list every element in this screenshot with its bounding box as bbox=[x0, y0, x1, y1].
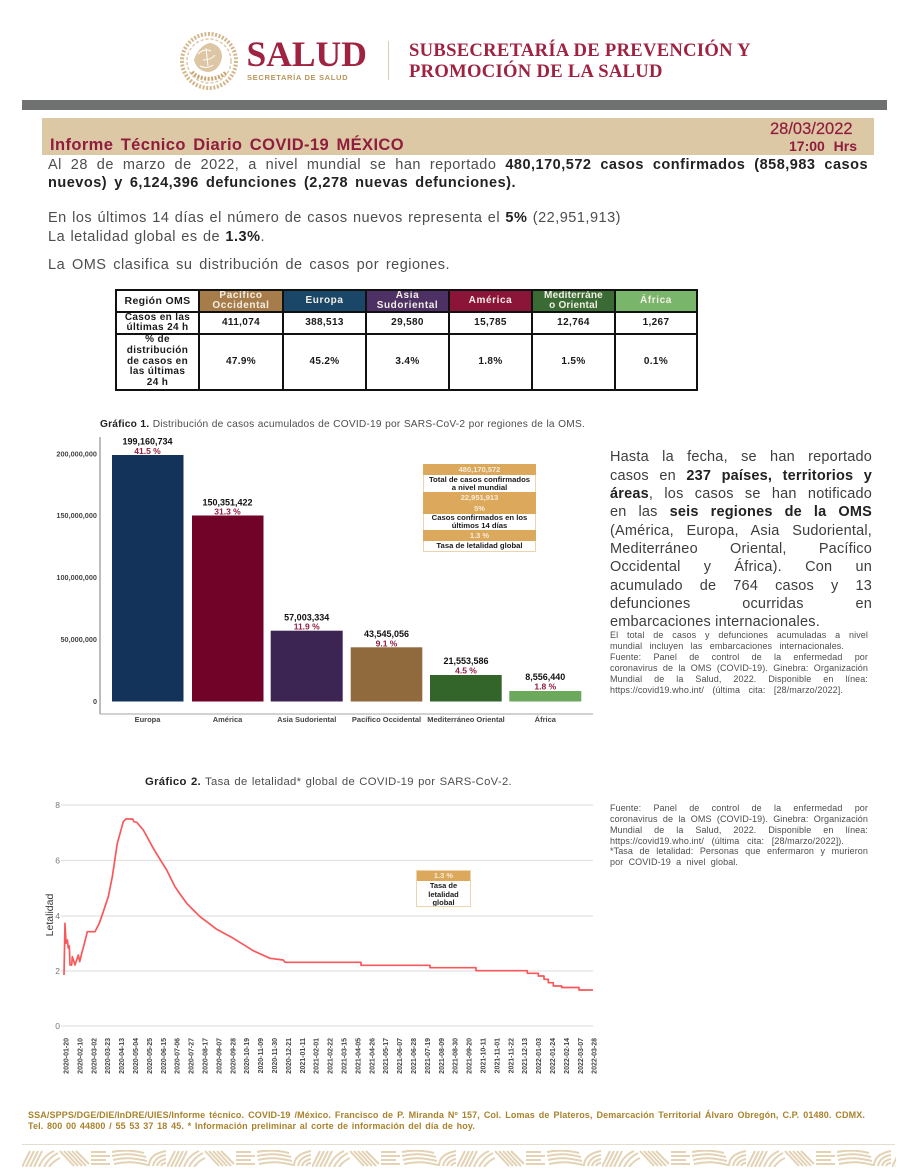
text block: countries and regions: (América, Europa, Asia Sudoriental, bbox=[610, 523, 872, 539]
report time: 17:00 Hrs bbox=[789, 138, 857, 154]
text block: countries and regions: acumulado de 764 casos y 13 bbox=[610, 578, 872, 594]
x axis labels: Pacífico Occidental bbox=[352, 715, 421, 724]
table header row: Occidental bbox=[212, 300, 270, 311]
header: Salud logo and subsecretariat name bbox=[180, 32, 751, 90]
report date: 28/03/2022 bbox=[770, 120, 853, 138]
bar percentages: 31.3 % bbox=[214, 506, 241, 516]
x axis date labels: 2022-03-07 bbox=[578, 1038, 585, 1074]
bar values: 8,556,440 bbox=[525, 672, 565, 682]
bar values bbox=[122, 436, 565, 682]
bar percentages: 9.1 % bbox=[376, 638, 398, 648]
bar values: 57,003,334 bbox=[284, 612, 329, 622]
x axis date labels: 2021-09-20 bbox=[467, 1038, 474, 1074]
x axis date labels: 2021-11-01 bbox=[494, 1038, 501, 1073]
row: cases in last 24 h: 29,580 bbox=[391, 317, 424, 328]
x axis date labels: 2022-01-24 bbox=[550, 1038, 557, 1074]
source note for chart 2: coronavirus de la OMS (COVID-19). Ginebra: Organización bbox=[610, 814, 868, 824]
subsecretariat name: PROMOCIÓN DE LA SALUD bbox=[409, 61, 663, 82]
table header row: Mediterráne bbox=[544, 290, 603, 301]
source note for chart 1: coronavirus de la OMS (COVID-19). Ginebra: Organización bbox=[610, 663, 868, 673]
row: percentage distribution: 1.5% bbox=[561, 356, 586, 367]
source note for chart 2: https://covid19.who.int/ (última cita: [28/marzo/2022]). bbox=[610, 836, 844, 846]
callout: global fatality rate: global bbox=[432, 898, 455, 907]
bar values: 43,545,056 bbox=[364, 629, 409, 639]
y axis title: Letalidad bbox=[44, 894, 56, 936]
x axis date labels: 2020-11-30 bbox=[272, 1038, 279, 1073]
bars bbox=[112, 455, 581, 702]
y axis labels: 0 bbox=[93, 697, 97, 706]
table header row: Sudoriental bbox=[377, 300, 438, 311]
bar values: 21,553,586 bbox=[443, 656, 489, 666]
y axis labels: 50,000,000 bbox=[60, 635, 97, 644]
row: percentage distribution: 47.9% bbox=[226, 356, 256, 367]
x axis date labels: 2020-03-23 bbox=[105, 1038, 112, 1074]
y axis labels bbox=[56, 450, 97, 706]
x axis date labels: 2020-10-19 bbox=[244, 1038, 251, 1074]
x axis labels: Europa bbox=[135, 715, 161, 724]
x axis date labels: 2021-08-09 bbox=[439, 1038, 446, 1074]
intro paragraph bbox=[48, 157, 868, 191]
text block: countries and regions: en las seis regiones de la OMS bbox=[610, 504, 872, 520]
intro paragraph: nuevos) y 6,124,396 defunciones (2,278 nuevas defunciones). bbox=[48, 175, 516, 191]
y axis labels: 0 bbox=[55, 1021, 60, 1031]
x axis date labels: 2022-01-03 bbox=[536, 1038, 543, 1074]
x axis labels: Mediterráneo Oriental bbox=[427, 715, 505, 724]
row: percentage distribution: 45.2% bbox=[309, 356, 340, 367]
x axis date labels: 2021-05-17 bbox=[383, 1038, 390, 1074]
footer address: Tel. 800 00 44800 / 55 53 37 18 45. * Información preliminar al corte de información del día de hoy. bbox=[28, 1121, 475, 1131]
source note for chart 2: por COVID-19 a nivel global. bbox=[610, 857, 738, 867]
bar values: 150,351,422 bbox=[202, 498, 253, 508]
source note for chart 2: Fuente: Panel de control de la enfermedad por bbox=[610, 803, 868, 813]
text block: countries and regions: áreas, los casos se han notificado bbox=[610, 486, 872, 502]
row: percentage distribution bbox=[127, 334, 668, 388]
grid lines bbox=[61, 805, 593, 1026]
table header row bbox=[125, 290, 696, 388]
x axis date labels: 2020-09-28 bbox=[230, 1038, 237, 1074]
table header row: Región OMS bbox=[125, 295, 190, 307]
x axis date labels: 2020-12-21 bbox=[286, 1038, 293, 1074]
row: cases in last 24 h: Casos en las bbox=[125, 312, 190, 323]
x axis date labels: 2021-06-07 bbox=[397, 1038, 404, 1074]
x axis labels bbox=[135, 715, 557, 724]
logo wordmark: SALUD: SALUD bbox=[246, 34, 367, 74]
source note for chart 1: mundial incluyen las embarcaciones internacionales. bbox=[610, 641, 844, 651]
source note for chart 2 bbox=[610, 803, 868, 867]
y axis labels: 150,000,000 bbox=[56, 511, 97, 520]
source note for chart 1: El total de casos y defunciones acumuladas a nivel bbox=[610, 630, 868, 640]
text block: countries and regions: Hasta la fecha, se han reportado bbox=[610, 449, 872, 465]
last 14 days text: En los últimos 14 días el número de casos nuevos representa el 5% (22,951,913) bbox=[48, 210, 621, 226]
x axis date labels: 2021-02-22 bbox=[328, 1038, 335, 1074]
callout: global totals: últimos 14 días bbox=[452, 520, 507, 530]
x axis date labels: 2020-05-25 bbox=[147, 1038, 154, 1074]
bar percentages: 1.8 % bbox=[534, 682, 557, 692]
callout: global totals: 22,951,913 bbox=[461, 492, 498, 502]
last 14 days text: La letalidad global es de 1.3%. bbox=[48, 229, 265, 245]
regions intro text: La OMS clasifica su distribución de casos por regiones. bbox=[48, 257, 450, 273]
x axis date labels: 2021-02-01 bbox=[314, 1038, 321, 1074]
callout: global fatality rate: letalidad bbox=[428, 890, 459, 898]
bar percentages: 41.5 % bbox=[134, 446, 161, 456]
x axis date labels: 2022-02-14 bbox=[564, 1038, 571, 1074]
text block: countries and regions: defunciones ocurridas en bbox=[610, 596, 872, 612]
intro paragraph: Al 28 de marzo de 2022, a nivel mundial se han reportado 480,170,572 casos confirmados (858,983 casos bbox=[48, 157, 868, 173]
y axis labels bbox=[55, 800, 60, 1031]
callout: global totals: Total de casos confirmados bbox=[429, 474, 530, 484]
callout: global fatality rate: Tasa de bbox=[430, 881, 457, 890]
row: percentage distribution: distribución bbox=[127, 345, 188, 356]
callout: global totals: Tasa de letalidad global bbox=[436, 540, 523, 550]
text block: countries and regions: Mediterráneo Oriental, Pacífico bbox=[610, 541, 872, 557]
table header row: Asia bbox=[396, 290, 419, 301]
bar values: 199,160,734 bbox=[122, 436, 173, 446]
table header row: o Oriental bbox=[549, 300, 598, 311]
x axis date labels: 2020-09-07 bbox=[216, 1038, 223, 1074]
title banner bbox=[42, 118, 874, 155]
x axis date labels: 2020-08-17 bbox=[202, 1038, 210, 1074]
decorative footer band bbox=[22, 1150, 896, 1167]
x axis date labels: 2021-03-15 bbox=[342, 1038, 348, 1074]
y axis labels: 8 bbox=[55, 800, 60, 810]
row: cases in last 24 h: 12,764 bbox=[557, 317, 590, 328]
bar percentages bbox=[134, 446, 557, 692]
x axis date labels: 2021-04-26 bbox=[369, 1038, 376, 1074]
callout: global fatality rate bbox=[416, 870, 471, 907]
row: cases in last 24 h: 411,074 bbox=[222, 317, 260, 328]
x axis date labels: 2021-12-13 bbox=[522, 1038, 529, 1074]
fatality line bbox=[64, 819, 593, 990]
callout: global totals: 1.3 % bbox=[470, 530, 489, 540]
row: percentage distribution: de casos en bbox=[127, 356, 188, 367]
x axis labels: Asia Sudoriental bbox=[277, 715, 336, 724]
bar percentages: 4.5 % bbox=[455, 666, 477, 676]
text block: countries and regions: Occidental y África). Con un bbox=[610, 559, 872, 575]
x axis date labels: 2021-08-30 bbox=[453, 1038, 460, 1074]
footer address bbox=[28, 1110, 865, 1131]
x axis labels: América bbox=[213, 715, 243, 724]
y axis labels: 200,000,000 bbox=[56, 450, 97, 458]
row: percentage distribution: 3.4% bbox=[395, 356, 420, 367]
table header row: América bbox=[469, 295, 512, 306]
row: percentage distribution: las últimas bbox=[130, 366, 185, 377]
row: cases in last 24 h bbox=[125, 312, 669, 333]
line chart: global case fatality rate bbox=[44, 800, 599, 1074]
x axis date labels: 2021-10-11 bbox=[480, 1038, 488, 1073]
last 14 days text bbox=[48, 210, 621, 245]
table header row: África bbox=[640, 295, 672, 306]
x axis date labels: 2020-03-02 bbox=[91, 1038, 98, 1074]
x axis date labels: 2020-05-04 bbox=[133, 1038, 140, 1074]
callout: global totals bbox=[423, 464, 536, 552]
row: percentage distribution: 24 h bbox=[147, 377, 168, 388]
subsecretariat name bbox=[409, 40, 751, 82]
chart title: Gráfico 2: Gráfico 2. Tasa de letalidad* global de COVID-19 por SARS-CoV-2. bbox=[145, 776, 512, 788]
x axis date labels: 2022-03-28 bbox=[592, 1038, 599, 1074]
source note for chart 2: Mundial de la Salud, 2022. Disponible en línea: bbox=[610, 825, 868, 835]
source note for chart 1: Fuente: Panel de control de la enfermedad por bbox=[610, 652, 868, 662]
text block: countries and regions bbox=[610, 449, 872, 630]
report title: Informe Técnico Diario COVID-19 MÉXICO bbox=[50, 136, 404, 154]
x axis date labels: 2020-07-06 bbox=[175, 1038, 182, 1074]
x axis date labels: 2021-06-28 bbox=[411, 1038, 418, 1074]
x axis date labels: 2021-11-22 bbox=[508, 1038, 515, 1073]
x axis date labels: 2020-01-20 bbox=[64, 1038, 70, 1074]
logo caption: SECRETARÍA DE SALUD bbox=[247, 73, 348, 82]
x axis date labels: 2021-04-05 bbox=[355, 1038, 362, 1074]
source note for chart 1: Mundial de la Salud, 2022. Disponible en línea: bbox=[610, 674, 868, 684]
y axis labels: 2 bbox=[55, 966, 60, 976]
x axis date labels bbox=[64, 1038, 599, 1074]
text block: countries and regions: embarcaciones internacionales. bbox=[610, 614, 820, 630]
row: percentage distribution: 1.8% bbox=[478, 356, 503, 367]
callout: global totals: 5% bbox=[474, 504, 485, 512]
x axis date labels: 2020-11-09 bbox=[258, 1038, 265, 1073]
table: cases by WHO region bbox=[115, 289, 698, 391]
row: percentage distribution: % de bbox=[145, 334, 170, 345]
x axis date labels: 2020-02-10 bbox=[77, 1038, 84, 1074]
row: percentage distribution: 0.1% bbox=[644, 356, 668, 367]
table header row: Pacífico bbox=[219, 290, 263, 301]
x axis date labels: 2020-06-15 bbox=[161, 1038, 168, 1074]
y axis labels: 100,000,000 bbox=[56, 573, 97, 582]
bar chart: accumulated cases by region bbox=[56, 436, 593, 724]
text block: countries and regions: casos en 237 países, territorios y bbox=[610, 468, 872, 484]
callout: global totals: a nivel mundial bbox=[452, 482, 507, 492]
x axis date labels: 2021-01-11 bbox=[300, 1038, 307, 1073]
x axis date labels: 2020-04-13 bbox=[119, 1038, 126, 1074]
callout: global totals: Casos confirmados en los bbox=[432, 512, 527, 522]
source note for chart 2: *Tasa de letalidad: Personas que enfermaron y murieron bbox=[610, 846, 868, 856]
icon: national emblem bbox=[180, 32, 238, 90]
source note for chart 1: https://covid19.who.int/ (última cita: [28/marzo/2022]. bbox=[610, 685, 843, 695]
subsecretariat name: SUBSECRETARÍA DE PREVENCIÓN Y bbox=[409, 40, 751, 61]
callout: global totals: 480,170,572 bbox=[459, 465, 500, 474]
source note for chart 1 bbox=[610, 630, 868, 695]
bar percentages: 11.9 % bbox=[294, 622, 320, 632]
row: cases in last 24 h: últimas 24 h bbox=[126, 322, 188, 333]
x axis date labels: 2021-07-19 bbox=[425, 1038, 432, 1074]
row: cases in last 24 h: 388,513 bbox=[305, 317, 344, 328]
y axis labels: 4 bbox=[55, 911, 60, 921]
x axis date labels: 2020-07-27 bbox=[189, 1038, 196, 1074]
footer address: SSA/SPPS/DGE/DIE/InDRE/UIES/Informe técnico. COVID-19 /México. Francisco de P. Miranda Nº 157, Col. Lomas de Plateros, Demarcación Territorial Álvaro Obregón, C.P. 01480. CDMX. bbox=[28, 1110, 865, 1120]
row: cases in last 24 h: 1,267 bbox=[643, 317, 669, 328]
y axis labels: 6 bbox=[55, 856, 60, 866]
table header row: Europa bbox=[305, 295, 344, 306]
chart title: Gráfico 1: Gráfico 1. Distribución de casos acumulados de COVID-19 por SARS-CoV-2 por regiones de la OMS. bbox=[100, 419, 585, 430]
callout: global fatality rate: 1.3 % bbox=[434, 871, 453, 880]
row: cases in last 24 h: 15,785 bbox=[474, 317, 507, 328]
x axis labels: África bbox=[535, 715, 557, 724]
